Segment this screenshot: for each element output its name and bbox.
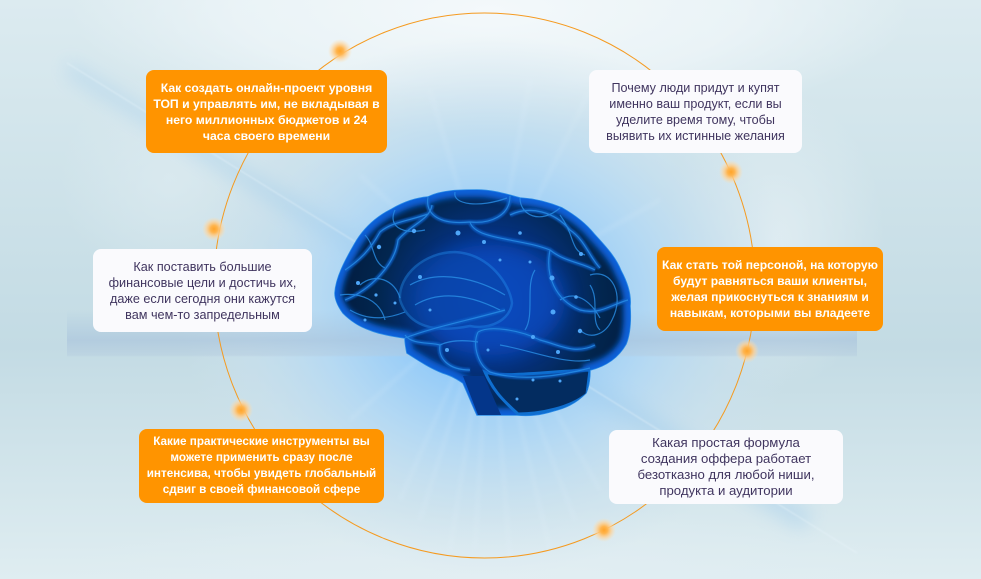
folds	[340, 192, 628, 377]
rays	[350, 80, 660, 560]
brain illustration	[334, 189, 632, 416]
horizontal band	[67, 310, 857, 357]
temporal lobe	[400, 252, 512, 329]
card 1: онлайн-проект: часа своего времени	[203, 128, 330, 142]
inner rim glow	[335, 190, 630, 415]
card 1: онлайн-проект: ТОП и управлять им, не вкладывая в	[153, 96, 380, 110]
card 5: инструменты: Какие практические инструменты вы	[153, 435, 370, 448]
brain stem	[463, 376, 501, 415]
diagonal streak	[67, 60, 815, 530]
card 2: истинные желания: уделите время тому, чтобы	[616, 112, 775, 126]
card 2: истинные желания: выявить их истинные желания	[606, 128, 785, 142]
card 1: онлайн-проект	[146, 70, 387, 153]
card 2: истинные желания	[589, 70, 802, 153]
card 6: формула оффера: создания оффера работает	[641, 451, 811, 466]
cerebellum	[485, 370, 590, 414]
card 5: инструменты: сдвиг в своей финансовой сфере	[163, 483, 360, 496]
card 6: формула оффера: продукта и аудитории	[659, 483, 793, 498]
card 1: онлайн-проект: Как создать онлайн-проект уровня	[161, 80, 372, 94]
card 3: персона: Как стать той персоной, на которую	[662, 258, 878, 272]
card 2: истинные желания: Почему люди придут и купят	[612, 80, 780, 94]
card 4: финансовые цели: финансовые цели и достичь их,	[109, 276, 296, 290]
dots	[356, 229, 583, 400]
spark 1	[328, 39, 352, 63]
card 5: инструменты	[139, 429, 384, 503]
card 1: онлайн-проект: него миллионных бюджетов и 24	[166, 112, 367, 126]
card 6: формула оффера	[609, 430, 843, 504]
card 3: персона: навыкам, которыми вы владеете	[670, 306, 870, 320]
card 2: истинные желания: именно ваш продукт, если вы	[609, 96, 782, 110]
spark 5	[229, 398, 253, 422]
card 4: финансовые цели	[93, 249, 312, 332]
card 4: финансовые цели: Как поставить большие	[133, 260, 272, 274]
card 6: формула оффера: Какая простая формула	[652, 435, 800, 450]
central glow	[415, 245, 565, 355]
card 3: персона	[657, 247, 883, 331]
folds, wide soft layer	[345, 196, 628, 377]
spark 6	[592, 518, 616, 542]
card 5: инструменты: можете применить сразу после	[170, 451, 353, 464]
card 3: персона: будут равняться ваши клиенты,	[673, 274, 867, 288]
brain body	[335, 190, 630, 415]
card 3: персона: желая прикоснуться к знаниям и	[671, 290, 869, 304]
card 4: финансовые цели: вам чем-то запредельным	[125, 308, 280, 322]
card 4: финансовые цели: даже если сегодня они кажутся	[110, 292, 295, 306]
card 5: инструменты: интенсива, чтобы увидеть глобальный	[147, 467, 376, 480]
spark 2	[719, 160, 743, 184]
card 6: формула оффера: безотказно для любой ниши,	[638, 467, 814, 482]
spark 3	[202, 217, 226, 241]
spark 4	[735, 339, 759, 363]
